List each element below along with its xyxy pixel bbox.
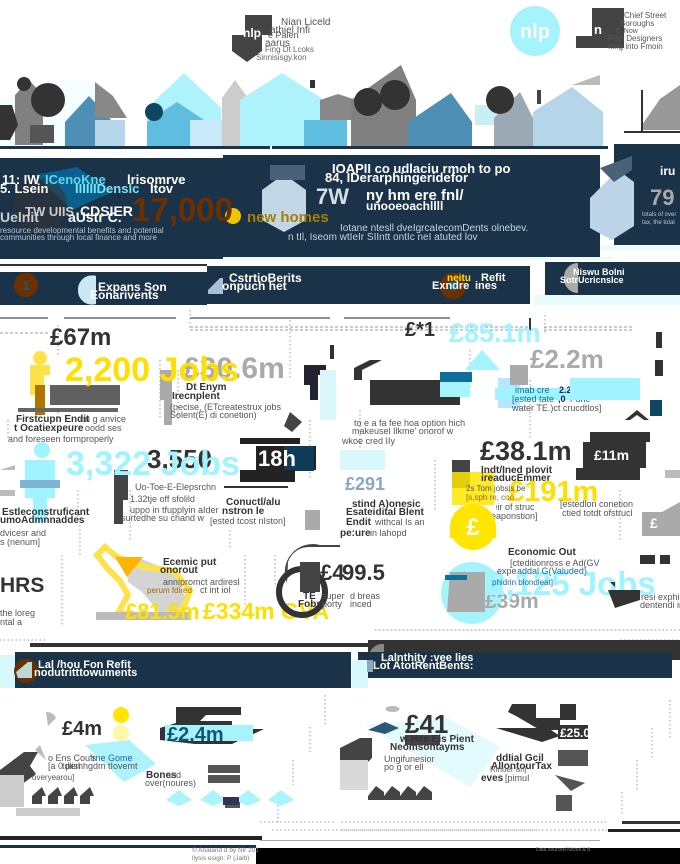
stat: direct employment: £30.6m — [183, 352, 285, 385]
stat: £85.1m with illustration: ll Tir — [576, 385, 592, 395]
stat: direct employment: Solent(E) di conetion) — [170, 410, 257, 420]
stat: new homes community payments: £41 — [405, 709, 448, 739]
panel: right house stat — [590, 150, 680, 250]
section bar 5: local finance benefits: Lal /hou Fon Refit — [38, 659, 131, 671]
stat: £85.1m with illustration: imab cre — [515, 385, 550, 395]
section bar 1: expenditure: 1 — [22, 278, 30, 293]
header logo with wordmark: e Palen — [268, 30, 299, 40]
stat: total jobs — [210, 438, 316, 526]
section bar 2: construction benefits: CstrtioBerits — [229, 271, 302, 285]
stat: on-site jobs: umoAdmnnaddes — [0, 515, 85, 526]
stat: new homes community payments — [340, 706, 500, 800]
stat: jobs with cyan circle: [cteditionross e Ad(GV — [510, 558, 600, 568]
stat: council tax — [145, 707, 294, 808]
icon: local spending right: resi exphi — [641, 592, 680, 602]
stat: £85.1m with illustration: ,0 — [558, 394, 566, 404]
stat: new homes community payments: Ungifunesior — [384, 754, 435, 764]
section bar 5: local finance benefits: nodutritttowuments — [34, 667, 137, 679]
stat: jobs with cyan circle: expe — [497, 566, 517, 576]
stat: construction expenditure: wkoe cred IIy — [341, 436, 396, 446]
panel: left key stat: lrisomrve — [127, 172, 186, 187]
stat: new homes bonus — [0, 707, 156, 816]
stat: supply chain jobs: 1.32tje off sfolild — [130, 494, 195, 504]
stat: construction expenditure — [305, 418, 465, 539]
stat: indirect employment: ecow peir of struc — [464, 502, 535, 512]
stat: additional council tax — [481, 704, 590, 811]
stat: £85.1m with illustration: Fune — [570, 394, 591, 404]
stat: indirect employment: ctied totdt ofstrucl — [562, 508, 633, 518]
footer credit: llysis esign: P (Jaib) — [192, 855, 249, 862]
stat: council tax: over(noures) — [145, 778, 196, 788]
stat: direct employment: Irecnplent — [172, 391, 220, 402]
stat: new homes community payments: po g or ell — [384, 762, 424, 772]
stat: construction jobs: t Ocatiexpeure — [14, 423, 84, 434]
icon: worker with tools — [284, 345, 336, 432]
stat: indirect employment: [estedlon conetion — [560, 499, 633, 509]
section bar 3: economic benefits — [422, 266, 530, 304]
stat: construction jobs: oodd ses — [85, 423, 122, 433]
stat: indirect employment: £191m — [508, 476, 598, 508]
footer credit: Data sourced Nichol & B — [536, 847, 591, 853]
icon: nlp cyan circle: nlp — [520, 21, 550, 43]
stat: economic output GVA: onorout — [160, 565, 198, 576]
section bar 6: community benefits: Lalnthity :vee lies — [381, 652, 473, 664]
stat: additional council tax: £25.0 — [560, 726, 590, 740]
section bar 2: construction benefits — [207, 266, 422, 304]
stat: indirect employment: £11m — [594, 447, 629, 463]
stat: £85.1m with illustration: £85.1m — [449, 318, 541, 348]
stat: construction expenditure: Esateidital Blent — [346, 507, 424, 518]
key figure: 17,000 new homes: new homes — [247, 209, 329, 226]
dotted guides lower — [260, 695, 670, 830]
stat: on-site jobs: s (nenum] — [0, 537, 40, 547]
stat: on-site jobs: Estleconstruficant — [2, 507, 90, 518]
zigzag rule strip — [0, 318, 634, 333]
stat: additional council tax: eves — [481, 773, 504, 784]
baseline strip under hero — [0, 144, 680, 150]
stat: dark figures top right: £2.2m — [530, 344, 604, 374]
panel: central headline statement: 7W — [316, 184, 349, 209]
stat: indirect employment: 2s Tom jobsis be — [466, 484, 526, 493]
panel: right house stat: 79 — [650, 185, 674, 210]
header logo with wordmark: nlp — [243, 26, 261, 40]
stat: supply chain jobs: Uo-Toe-E-Elepsrchn — [135, 482, 216, 492]
stat: direct employment: Dt Enym — [186, 382, 227, 393]
section bar 1: expenditure: Expans Son — [98, 280, 167, 294]
stat: economic output GVA: £334m GVA — [203, 598, 329, 624]
stat: direct employment: (pecise, (ETcreatestrux jobs — [170, 402, 282, 412]
partner logo and text: 6, Now — [616, 28, 639, 35]
section bar 1: expenditure: Eonarivents — [90, 288, 159, 302]
section bar 3: economic benefits: Refit — [481, 272, 506, 284]
stat: supply chain jobs — [114, 444, 219, 524]
section bar 4: local benefits: Niswu Bolni — [573, 267, 624, 277]
stat: total jobs: 18h — [258, 446, 296, 471]
section bar 6: community benefits — [352, 652, 672, 688]
stat: temporary jobs: Fobs — [298, 599, 322, 610]
black footer block — [256, 848, 680, 864]
section bar 3: economic benefits: Exndre — [432, 280, 469, 292]
stat: supply chain jobs: surtedhe su chand w — [121, 513, 205, 523]
stat: additional council tax: Rlnuer anj — [490, 765, 527, 774]
panel: left key stat — [0, 158, 223, 266]
stat: construction expenditure: Endit — [346, 517, 372, 528]
stat: temporary jobs: d breas — [350, 591, 381, 601]
section bar 5: local finance benefits — [0, 652, 351, 688]
panel: central headline statement — [222, 155, 614, 260]
icon: pound coin — [450, 504, 496, 550]
stat: construction jobs: 2,200 Jobs — [65, 351, 239, 389]
stat: construction expenditure: £291 — [345, 474, 385, 494]
stat: on-site jobs — [0, 442, 240, 547]
stat: operational jobs left: the loreg — [0, 608, 35, 618]
key figure: 17,000 new homes — [132, 191, 329, 228]
panel: left key stat: communities through local finance and more — [0, 233, 158, 242]
stat: jobs with cyan circle: £39m — [485, 590, 539, 613]
stat: indirect employment: Indt/Ined plovit — [481, 465, 553, 476]
partner logo and text: Plan Designers — [608, 34, 662, 43]
hero: row of houses and trees — [0, 65, 680, 146]
header logo with wordmark: Sinnisisgy.kon — [256, 53, 307, 62]
section bar 6: community benefits: Lot AtotRentBents: — [373, 660, 473, 672]
stat: dark figures top right: £*1 — [405, 319, 435, 341]
panel: left key stat: resource developmental benefits and potential — [0, 226, 164, 235]
black separator and grey disc — [30, 640, 680, 660]
panel: right house stat: iru — [660, 164, 675, 178]
stat: economic output GVA — [96, 547, 329, 624]
stat: indirect employment: ireaducEmmer — [481, 473, 551, 484]
stat: operational jobs left: HRS — [0, 574, 44, 597]
partner logo and text: n — [594, 22, 602, 37]
stat: new homes community payments: w Hes Eis Pient — [399, 734, 475, 745]
stat: jobs with cyan circle: addal G(Valuded) — [517, 566, 587, 576]
stat: construction jobs — [8, 324, 239, 444]
header logo with wordmark: aarus — [265, 38, 290, 49]
header logo with wordmark: athiel Infi — [270, 25, 310, 36]
panel: central headline statement: 84, IDerarphingeridefor — [325, 170, 468, 185]
section bar 4: local benefits — [534, 262, 680, 305]
dotted guide lines — [0, 310, 680, 640]
panel: left key stat: 11: IW — [2, 172, 40, 187]
stat: council tax: and — [166, 770, 181, 780]
stat: total jobs: Conuctl/alu — [226, 497, 280, 508]
stat: house icon right: £ — [650, 515, 658, 531]
stat: supply chain jobs: 3,550 — [147, 444, 212, 474]
panel: left key stat: 5. Lsein — [0, 181, 48, 196]
stat: temporary jobs: TE — [303, 591, 316, 602]
stat: total jobs: [ested tcost nIston] — [210, 516, 286, 526]
stat: temporary jobs: porty — [322, 599, 343, 609]
panel: left key stat: TW UIIS — [25, 204, 74, 219]
footer credit: © Analand d by Nlr 201 — [192, 846, 259, 854]
stat: new homes bonus: £4m — [62, 718, 102, 740]
section bar 3: economic benefits: neitu — [447, 273, 471, 284]
stat: new homes bonus: tdlishhgdm tIovemt — [62, 761, 138, 771]
icon: local spending right — [608, 555, 680, 610]
stat: dark figures top right — [405, 319, 663, 420]
stat: on-site jobs: 3,322 Jobs — [66, 445, 240, 483]
stat: indirect employment: £38.1m — [480, 436, 572, 466]
panel: left key stat: ICenoKne — [45, 172, 106, 187]
stat: supply chain jobs: uppo in tfupplyin aIder — [130, 505, 219, 515]
stat: jobs with cyan circle: phidrin blondleat] — [492, 578, 553, 587]
footer credit — [192, 846, 591, 862]
panel: central headline statement: n tIl, Iseom wtIeIr SIIntt ontIc neI atuted lov — [288, 232, 478, 243]
stat: council tax: £2.4m — [167, 724, 224, 746]
stat: £85.1m with illustration: 2.20 — [559, 385, 577, 395]
stat: jobs with cyan circle: Economic Out — [508, 547, 576, 558]
stat: construction jobs: Firstcupn Endit — [16, 414, 90, 425]
stat: new homes bonus: [a 0 pen — [48, 761, 81, 771]
stat: indirect employment — [452, 432, 650, 521]
stat: direct employment — [160, 352, 285, 425]
stat: new homes bonus: o Ens Cou's — [48, 753, 97, 763]
section bar 2: construction benefits: onpuch het — [222, 279, 287, 293]
panel: left key stat: IIIIIIDenslc — [75, 181, 139, 196]
stat: construction jobs: on g anvice — [80, 414, 126, 424]
panel: left key stat: aUstr C. — [68, 209, 122, 225]
header logo with wordmark — [232, 15, 330, 62]
panel: left key stat: CDSIER — [80, 203, 133, 219]
stat: economic output GVA: annipromct ardiresl — [163, 577, 240, 587]
stat: on-site jobs: dvicesr and — [0, 528, 46, 538]
stat: construction expenditure: withcal Is an — [374, 517, 425, 527]
stat: construction expenditure: makeusel Ilkme' onorof w — [352, 426, 454, 436]
stat: new homes bonus: frne Gome — [90, 753, 133, 763]
stat: additional council tax: AlIontourTax — [491, 761, 552, 772]
panel: left key stat: Uelnit — [0, 209, 39, 225]
stat: temporary jobs: 99.5 — [342, 560, 385, 585]
stat: temporary jobs: inced — [350, 599, 372, 609]
icon: nlp cyan circle — [510, 6, 560, 56]
stat: economic output GVA: ct int iol — [200, 585, 231, 595]
stat: construction expenditure: pe:ure — [340, 528, 371, 539]
section bar 1: expenditure — [0, 272, 207, 305]
icon: pound coin: £ — [466, 514, 480, 541]
stat: operational jobs left — [0, 574, 44, 627]
header logo with wordmark: Nian Liceld — [281, 17, 330, 28]
key figure: 17,000 new homes: 17,000 — [132, 191, 233, 228]
section bar 3: economic benefits: ines — [475, 280, 497, 292]
stat: indirect employment: [s,sph re, coo — [466, 493, 515, 502]
bottom rules — [0, 821, 680, 848]
stat: £85.1m with illustration: [ested tate — [512, 394, 554, 404]
stat: construction jobs: and foreseen formproperly — [8, 434, 114, 444]
partner logo and text: Boroughs — [620, 19, 654, 28]
stat: construction jobs: £67m — [50, 324, 111, 351]
stat: economic output GVA: perum fdired — [147, 586, 192, 595]
panel: central headline statement: ny hm ere fnl/ — [366, 187, 464, 204]
panel: right house stat: tax, the total — [642, 220, 675, 226]
panel: central headline statement: IOAPII co udlaciu rmoh to po — [332, 161, 510, 176]
stat: additional council tax: [pimuI — [505, 773, 530, 783]
stat: temporary jobs: super — [322, 591, 345, 601]
panel: central headline statement: unooeoachllll — [366, 199, 443, 213]
stat: additional council tax: ddIial Gcil — [496, 753, 544, 764]
stat: jobs with cyan circle — [441, 547, 656, 624]
stat: operational jobs left: ntal a — [0, 617, 22, 627]
stat: house icon right — [642, 470, 680, 536]
stat: construction expenditure: to e a fa fee hoa option hich — [354, 418, 465, 428]
panel: central headline statement: Iotane ntesll dveIgrcaIecomDents olnebev. — [340, 223, 528, 234]
stat: new homes community payments: Neomsontayms — [390, 742, 465, 753]
stat: indirect employment: nom; veaponstion] — [464, 511, 538, 521]
stat: construction expenditure: in lahopd — [370, 528, 407, 538]
partner logo and text: ning into Fmoin — [608, 42, 663, 51]
stat: economic output GVA: £81.5m — [125, 599, 200, 624]
partner logo and text — [576, 8, 667, 51]
stat: economic output GVA: Ecemic put — [163, 557, 217, 568]
stat: construction expenditure: stind A)onesic — [352, 499, 421, 510]
stat: £85.1m with illustration: water TE.)ct crucdtlos] — [511, 403, 601, 413]
stat: new homes bonus: overyearou] — [32, 773, 74, 782]
partner logo and text: Chief Street — [624, 11, 667, 20]
panel: left key stat: Itov — [150, 181, 174, 196]
header logo with wordmark: Fing Dt Lcoks — [265, 45, 314, 54]
stat: council tax: Bones — [146, 770, 177, 781]
stat: £85.1m with illustration — [354, 318, 601, 413]
section bar 4: local benefits: SotrUcricnsIce — [560, 275, 624, 285]
stat: temporary jobs: £4 — [320, 560, 345, 585]
stat: total jobs: nstron le — [222, 506, 265, 517]
panel: right house stat: totals of over — [642, 212, 676, 218]
stat: jobs with cyan circle: 2,125 Jobs — [487, 565, 656, 602]
stat: temporary jobs — [279, 544, 385, 615]
